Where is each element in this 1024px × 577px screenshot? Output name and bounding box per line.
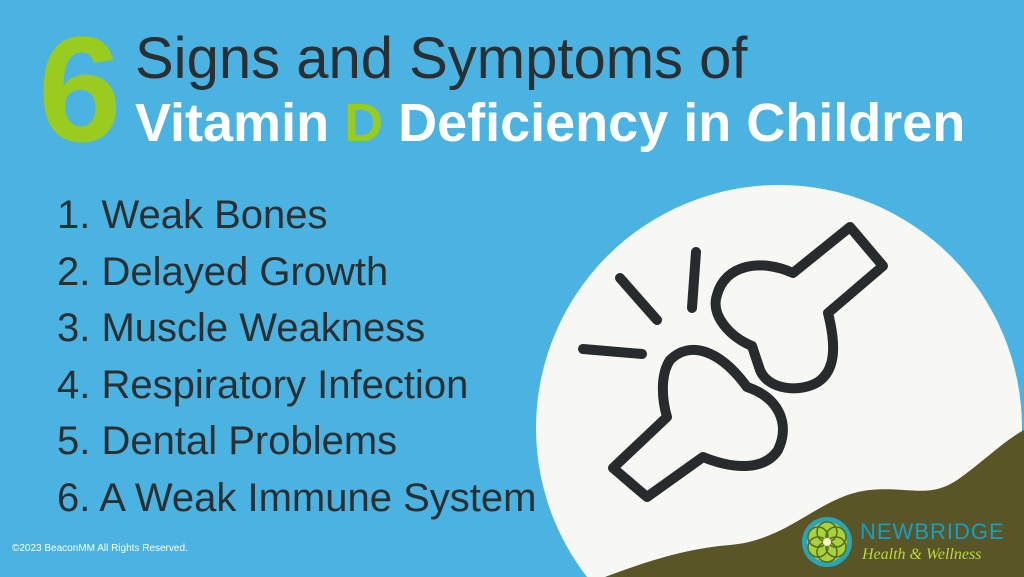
- logo: [802, 517, 1005, 567]
- title: Vitamin D Deficiency in Children: [135, 93, 965, 153]
- title: [135, 26, 965, 153]
- list of symptoms: [57, 193, 536, 520]
- list of symptoms: 5. Dental Problems: [57, 419, 397, 463]
- copyright: ©2023 BeaconMM All Rights Reserved.: [12, 543, 188, 554]
- title number 6: 6: [38, 5, 121, 173]
- title: Signs and Symptoms of: [135, 26, 748, 91]
- list of symptoms: 2. Delayed Growth: [57, 250, 388, 294]
- list of symptoms: 6. A Weak Immune System: [57, 476, 536, 520]
- logo: Health & Wellness: [862, 546, 981, 563]
- list of symptoms: 4. Respiratory Infection: [57, 362, 468, 406]
- list of symptoms: 3. Muscle Weakness: [57, 306, 425, 350]
- icon: logo flower: [802, 517, 852, 567]
- list of symptoms: 1. Weak Bones: [57, 193, 328, 237]
- logo text: NEWBRIDGE: [860, 519, 1005, 544]
